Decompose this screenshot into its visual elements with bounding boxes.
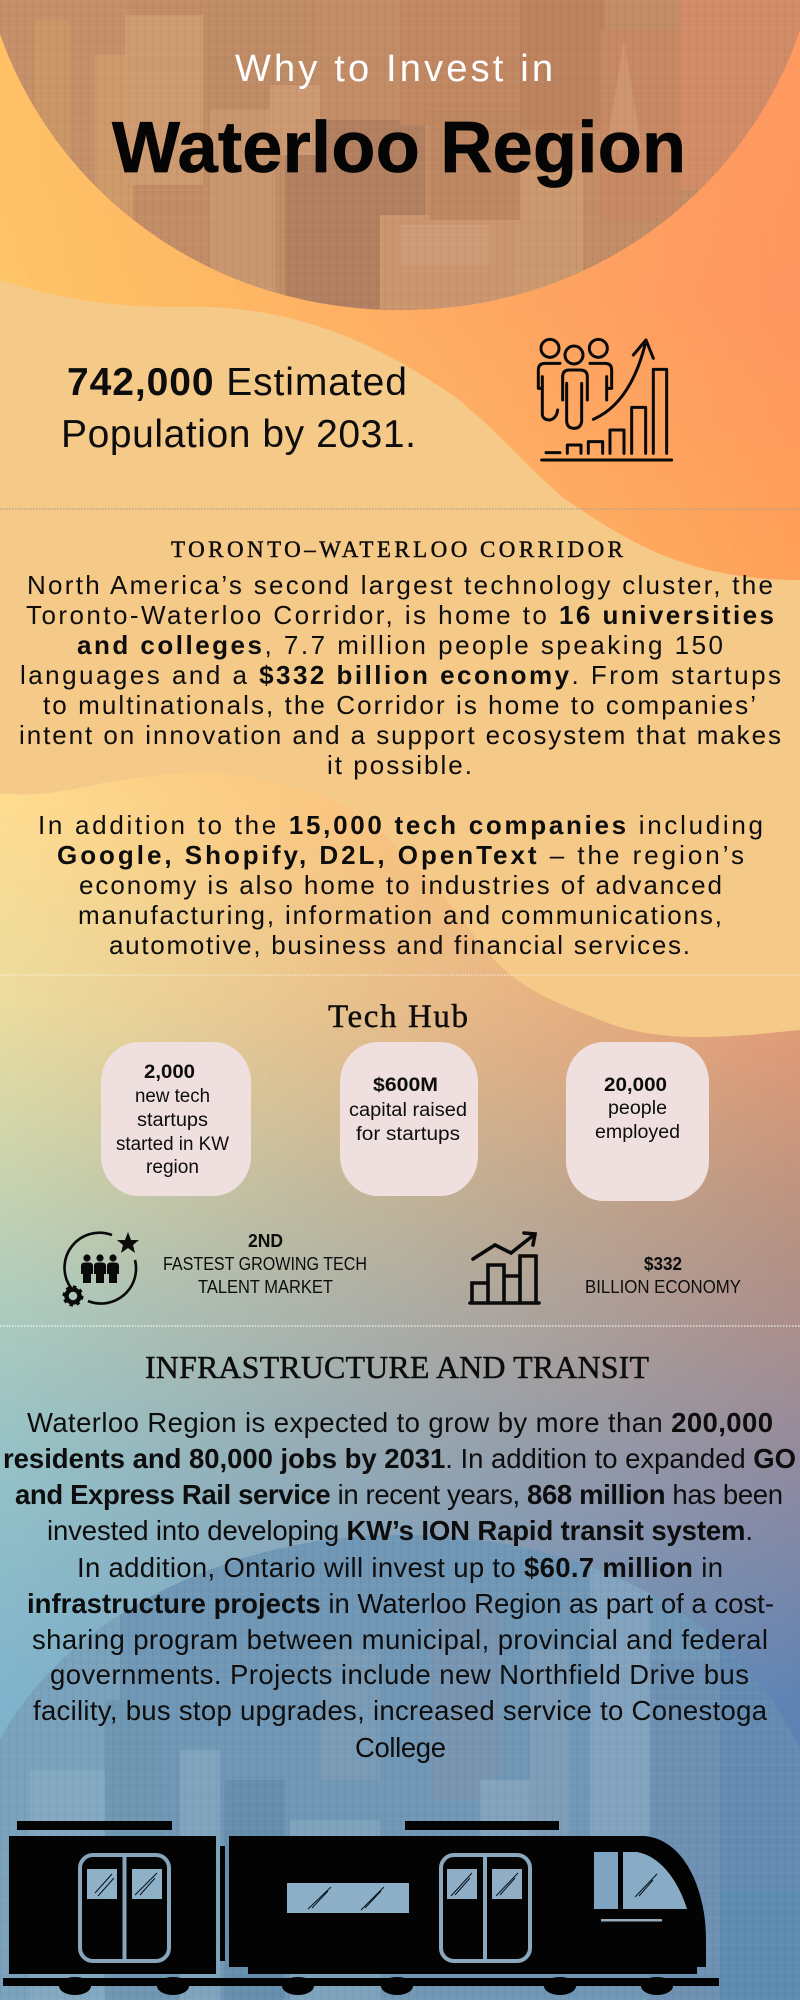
stat: $332 billion economy <box>585 1254 741 1297</box>
title: Waterloo Region: Waterloo Region <box>112 108 686 188</box>
text block: infrastructure and transit description: Waterloo Region is expected to grow by more than 200,000 <box>27 1407 773 1438</box>
stat: $332 billion economy: $332 <box>644 1254 682 1274</box>
text block: infrastructure and transit description: College <box>355 1732 446 1763</box>
card: 2,000 new tech startups <box>101 1042 251 1196</box>
text block: tech companies and industries: automotive, business and financial services. <box>109 930 690 960</box>
card: $600M capital raised: for startups <box>356 1124 460 1145</box>
text block: infrastructure and transit description: infrastructure projects in Waterloo Region as part of a cost- <box>27 1588 774 1619</box>
card: 2,000 new tech startups: new tech <box>135 1086 210 1107</box>
text block: corridor description: Toronto-Waterloo Corridor, is home to 16 universities <box>26 600 774 630</box>
text block: corridor description: intent on innovation and a support ecosystem that makes <box>19 720 781 750</box>
card: 2,000 new tech startups: started in KW <box>116 1134 229 1155</box>
stat: $332 billion economy: BILLION ECONOMY <box>585 1277 741 1297</box>
blob: cream wave background <box>0 280 800 1037</box>
card: 2,000 new tech startups: startups <box>137 1110 208 1131</box>
text block: tech companies and industries: In addition to the 15,000 tech companies including <box>38 810 763 840</box>
icon: people with growth chart <box>538 339 672 460</box>
card: $600M capital raised: capital raised <box>349 1100 467 1121</box>
text block: tech companies and industries: Google, Shopify, D2L, OpenText – the region’s <box>57 840 744 870</box>
icon: talent circle with star, people and gear <box>64 1232 139 1305</box>
stat: 2nd fastest growing tech talent market <box>163 1231 367 1297</box>
text block: tech companies and industries <box>38 810 763 960</box>
stat: population estimate: Population by 2031. <box>61 413 416 456</box>
text block: infrastructure and transit description <box>3 1407 796 1763</box>
rail and wheels <box>3 1977 719 1995</box>
text block: corridor description: languages and a $332 billion economy. From startups <box>20 660 781 690</box>
card: 20,000 people employed: people <box>608 1098 667 1119</box>
text block: tech companies and industries: manufacturing, information and communications, <box>78 900 722 930</box>
front train car <box>229 1821 706 1974</box>
text block: infrastructure and transit description: In addition, Ontario will invest up to $60.7 million in <box>77 1552 723 1583</box>
heading: infrastructure and transit: INFRASTRUCTURE AND TRANSIT <box>145 1349 649 1385</box>
card: 2,000 new tech startups: region <box>146 1157 199 1178</box>
title: why to invest in: Why to Invest in <box>235 48 553 90</box>
text block: infrastructure and transit description: facility, bus stop upgrades, increased service to Conestoga <box>33 1695 768 1726</box>
text block: tech companies and industries: economy is also home to industries of advanced <box>79 870 722 900</box>
stat: population estimate <box>61 361 416 456</box>
heading: Tech Hub: Tech Hub <box>328 999 468 1035</box>
stat: 2nd fastest growing tech talent market: 2ND <box>248 1231 283 1251</box>
card: 2,000 new tech startups: 2,000 <box>144 1062 195 1083</box>
card: 20,000 people employed: 20,000 <box>604 1075 667 1096</box>
stat: 2nd fastest growing tech talent market: TALENT MARKET <box>198 1277 333 1297</box>
text block: corridor description: North America’s second largest technology cluster, the <box>27 570 773 600</box>
card: 20,000 people employed: employed <box>595 1122 680 1143</box>
card: $600M capital raised <box>340 1042 478 1196</box>
card: 20,000 people employed <box>566 1042 709 1201</box>
text block: corridor description: to multinationals, the Corridor is home to companies’ <box>43 690 756 720</box>
illustration: transit train <box>3 1821 719 1995</box>
text block: infrastructure and transit description: sharing program between municipal, provincial and federal <box>32 1624 768 1655</box>
text block: corridor description: and colleges, 7.7 million people speaking 150 <box>77 630 723 660</box>
heading: Toronto-Waterloo corridor: TORONTO–WATERLOO CORRIDOR <box>171 537 624 562</box>
icon: bar chart with rising arrow <box>470 1233 539 1303</box>
header image: city skyline in orange circle <box>0 0 800 320</box>
text block: infrastructure and transit description: invested into developing KW’s ION Rapid transit system. <box>47 1515 753 1546</box>
text block: corridor description <box>19 570 781 780</box>
text block: infrastructure and transit description: and Express Rail service in recent years, 868 million has been <box>15 1479 783 1510</box>
footer image: blue city skyline circle <box>0 1530 800 2000</box>
text block: infrastructure and transit description: residents and 80,000 jobs by 2031. In addition to expanded GO <box>3 1443 796 1474</box>
text block: corridor description: it possible. <box>327 750 472 780</box>
stat: population estimate: 742,000 Estimated <box>67 361 407 404</box>
rear train car <box>9 1821 216 1974</box>
text block: infrastructure and transit description: governments. Projects include new Northfield Drive bus <box>50 1659 749 1690</box>
card: $600M capital raised: $600M <box>373 1075 438 1096</box>
coupler <box>220 1846 225 1961</box>
stat: 2nd fastest growing tech talent market: FASTEST GROWING TECH <box>163 1254 367 1274</box>
